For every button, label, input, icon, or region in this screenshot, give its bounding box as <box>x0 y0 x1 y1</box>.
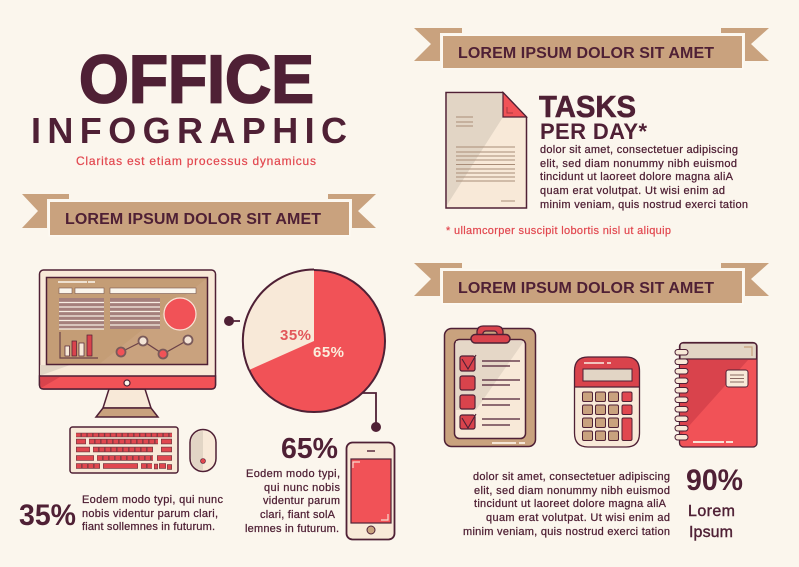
text block: tools <box>463 471 670 538</box>
tasks body text: dolor sit amet, consectetuer adipiscing <box>540 144 738 156</box>
ribbon heading: tools: LOREM IPSUM DOLOR SIT AMET <box>458 280 714 297</box>
icon: calculator <box>574 357 640 447</box>
text block: tools: elit, sed diam nonummy nibh euismod <box>474 485 670 497</box>
pie chart: 65% <box>313 344 344 361</box>
text block: 35%: Eodem modo typi, qui nunc <box>82 494 224 506</box>
tasks body text: elit, sed diam nonummy nibh euismod <box>540 158 737 170</box>
tasks heading: TASKS <box>539 89 636 124</box>
text block: 65%: lemnes in futurum. <box>245 523 339 535</box>
icon: notebook <box>675 342 757 447</box>
icon: mouse <box>190 430 216 472</box>
ribbon heading: tools <box>414 263 769 304</box>
title: INFOGRAPHIC <box>31 110 347 151</box>
text block: tools: quam erat volutpat. Ut wisi enim ad <box>486 512 670 524</box>
icon: keyboard <box>70 427 178 473</box>
stat: 90% <box>686 464 743 541</box>
ribbon heading: left <box>22 194 376 236</box>
stat: 90%: Lorem <box>688 503 735 520</box>
title: Claritas est etiam processus dynamicus <box>76 154 316 168</box>
ribbon heading: tasks <box>414 28 769 70</box>
tasks heading: PER DAY* <box>540 119 647 144</box>
text block: tools: dolor sit amet, consectetuer adipiscing <box>473 471 670 483</box>
tasks body text: minim veniam, quis nostrud exerci tation <box>540 199 748 211</box>
stat: 65%: 65% <box>281 433 338 465</box>
text block: tools: tincidunt ut laoreet dolore magna aliA <box>474 498 667 510</box>
title: OFFICE <box>79 42 314 118</box>
ribbon heading: left: LOREM IPSUM DOLOR SIT AMET <box>65 211 321 228</box>
text block: 35% <box>82 494 224 533</box>
tasks body text: tincidunt ut laoreet dolore magna aliA <box>540 171 734 183</box>
icon: document <box>446 92 526 208</box>
text block: 65%: clari, fiant solA <box>260 509 336 521</box>
text block: 35%: fiant sollemnes in futurum. <box>82 521 215 533</box>
tasks body text: quam erat volutpat. Ut wisi enim ad <box>540 185 725 197</box>
title <box>31 42 347 168</box>
text block: 65% <box>245 468 340 535</box>
pie chart: 35% <box>280 327 311 344</box>
footnote: * ullamcorper suscipit lobortis nisl ut aliquip <box>446 225 671 237</box>
icon: clipboard <box>444 326 536 446</box>
stat: 90%: 90% <box>686 464 743 497</box>
text block: 65%: Eodem modo typi, <box>246 468 340 480</box>
tasks body text <box>540 144 748 211</box>
text block: 65%: videntur parum <box>263 495 340 507</box>
tasks heading <box>539 89 647 144</box>
icon: smartphone <box>346 442 394 540</box>
pie chart <box>224 270 385 432</box>
text block: 65%: qui nunc nobis <box>264 482 340 494</box>
text block: tools: minim veniam, quis nostrud exerci tation <box>463 526 670 538</box>
stat: 90%: Ipsum <box>689 524 733 541</box>
ribbon heading: tasks: LOREM IPSUM DOLOR SIT AMET <box>458 45 714 62</box>
icon: desktop monitor <box>40 270 216 417</box>
text block: 35%: nobis videntur parum clari, <box>82 508 218 520</box>
stat: 35%: 35% <box>19 499 76 532</box>
